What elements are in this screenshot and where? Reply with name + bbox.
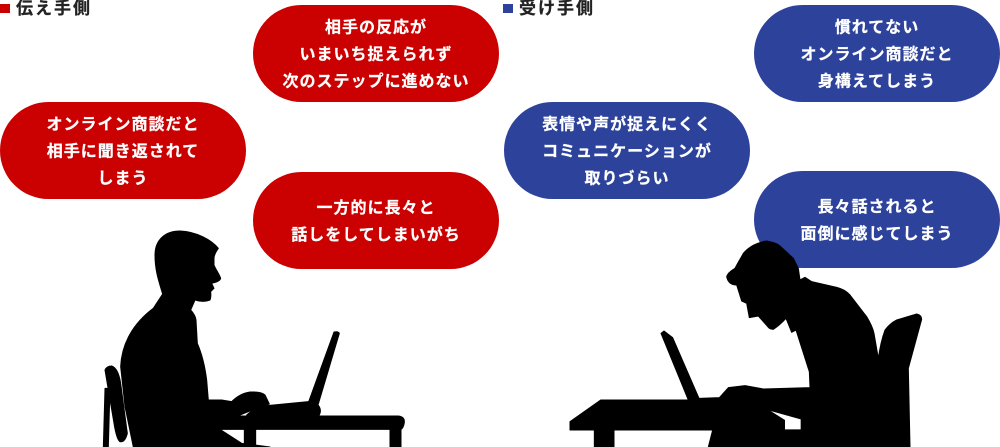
speech pill: sender top: いまいち捉えられず xyxy=(299,46,452,63)
speech pill: receiver top: 慣れてない xyxy=(835,19,919,36)
speech pill: receiver bottom: 長々話されると xyxy=(817,198,936,216)
silhouette: sender at laptop xyxy=(103,231,404,447)
speech pill: sender top: 次のステップに進めない xyxy=(282,73,470,90)
speech pill: sender bottom xyxy=(253,172,499,269)
speech pill: receiver bottom: 面倒に感じてしまう xyxy=(800,226,954,242)
speech pill: sender top xyxy=(253,5,499,102)
speech pill: sender left xyxy=(0,102,246,199)
speech pill: receiver left: 取りづらい xyxy=(584,170,670,187)
speech pill: receiver bottom xyxy=(754,171,1000,268)
speech pill: receiver top xyxy=(754,5,1000,102)
speech pill: sender bottom: 一方的に長々と xyxy=(316,200,436,216)
speech pill: receiver left: 表情や声が捉えにくく xyxy=(542,116,712,133)
speech pill: sender top: 相手の反応が xyxy=(325,19,427,36)
speech pill: sender left: オンライン商談だと xyxy=(46,116,200,133)
silhouette: receiver at laptop xyxy=(570,241,922,447)
speech pill: receiver left: コミュニケーションが xyxy=(542,143,712,160)
speech pill: sender bottom: 話しをしてしまいがち xyxy=(291,226,461,244)
speech pill: receiver top: 身構えてしまう xyxy=(818,73,936,90)
speech pill: receiver top: オンライン商談だと xyxy=(800,46,954,63)
speech pill: receiver left xyxy=(504,102,750,199)
speech pill: sender left: しまう xyxy=(97,170,148,187)
speech pill: sender left: 相手に聞き返されて xyxy=(47,143,199,160)
